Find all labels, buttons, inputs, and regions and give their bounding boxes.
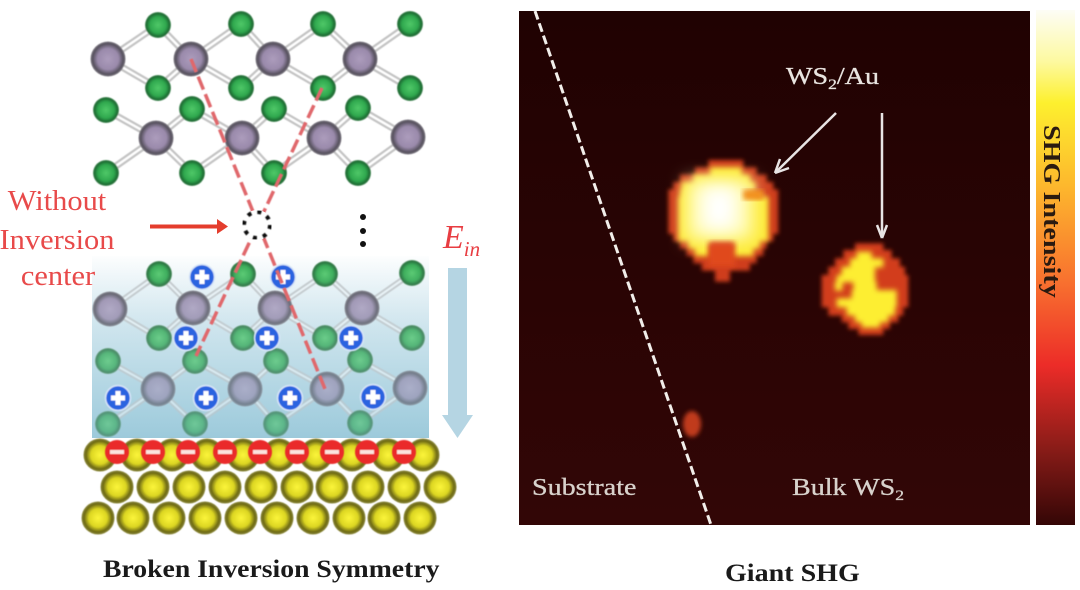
SHG spot: upper WS2/Au — [668, 160, 778, 282]
label: WS2/Au: /Au — [837, 63, 879, 90]
diagram: upper WS2 lattice — [90, 11, 426, 186]
arrow: pointing to inversion center — [150, 219, 228, 234]
map background — [519, 11, 1030, 525]
positive charges — [106, 264, 386, 410]
label: without inversion center: Without — [8, 186, 106, 217]
arrow: to lower spot — [877, 113, 887, 238]
label: WS2/Au: WS — [786, 63, 828, 90]
label: WS2/Au: 2 — [828, 75, 837, 93]
caption: giant SHG: Giant SHG — [725, 558, 860, 587]
negative charges — [105, 440, 416, 464]
label: without inversion center: Inversion — [0, 225, 115, 256]
label: bulk WS2: Bulk WS — [792, 474, 895, 501]
blue field gradient panel — [92, 256, 429, 438]
dotted circle: missing inversion center — [242, 210, 272, 240]
caption: broken inversion symmetry: Broken Inversion Symmetry — [103, 554, 439, 583]
SHG spot: lower WS2/Au — [822, 243, 908, 335]
dashed substrate boundary — [535, 11, 711, 525]
lattice bonds: upper layers — [106, 24, 410, 173]
gold substrate atoms — [82, 438, 456, 534]
label: E in: E — [443, 219, 464, 256]
vertical ellipsis dots — [360, 214, 366, 247]
label: without inversion center: center — [21, 261, 95, 292]
color bar — [1036, 10, 1075, 525]
atoms: lower tungsten purple — [92, 290, 428, 406]
lattice bonds: lower layers — [108, 273, 412, 424]
color bar label: SHG Intensity — [1038, 125, 1066, 298]
arrow: electric field — [442, 268, 473, 438]
label: bulk WS2: 2 — [895, 486, 904, 504]
diagram: lower WS2 lattice — [92, 260, 428, 437]
faint spot — [683, 411, 701, 437]
label: without inversion center — [0, 186, 115, 292]
red dashed inversion lines — [191, 59, 325, 389]
field tint over lower lattice — [92, 256, 429, 438]
label: E in: in — [464, 237, 480, 261]
atoms: upper tungsten purple — [90, 42, 426, 156]
arrow: to upper spot — [775, 113, 836, 173]
atoms: upper sulfur green — [93, 11, 423, 186]
atoms: lower sulfur green — [95, 260, 425, 437]
label: substrate: Substrate — [532, 474, 636, 501]
SHG map panel — [519, 11, 1030, 525]
